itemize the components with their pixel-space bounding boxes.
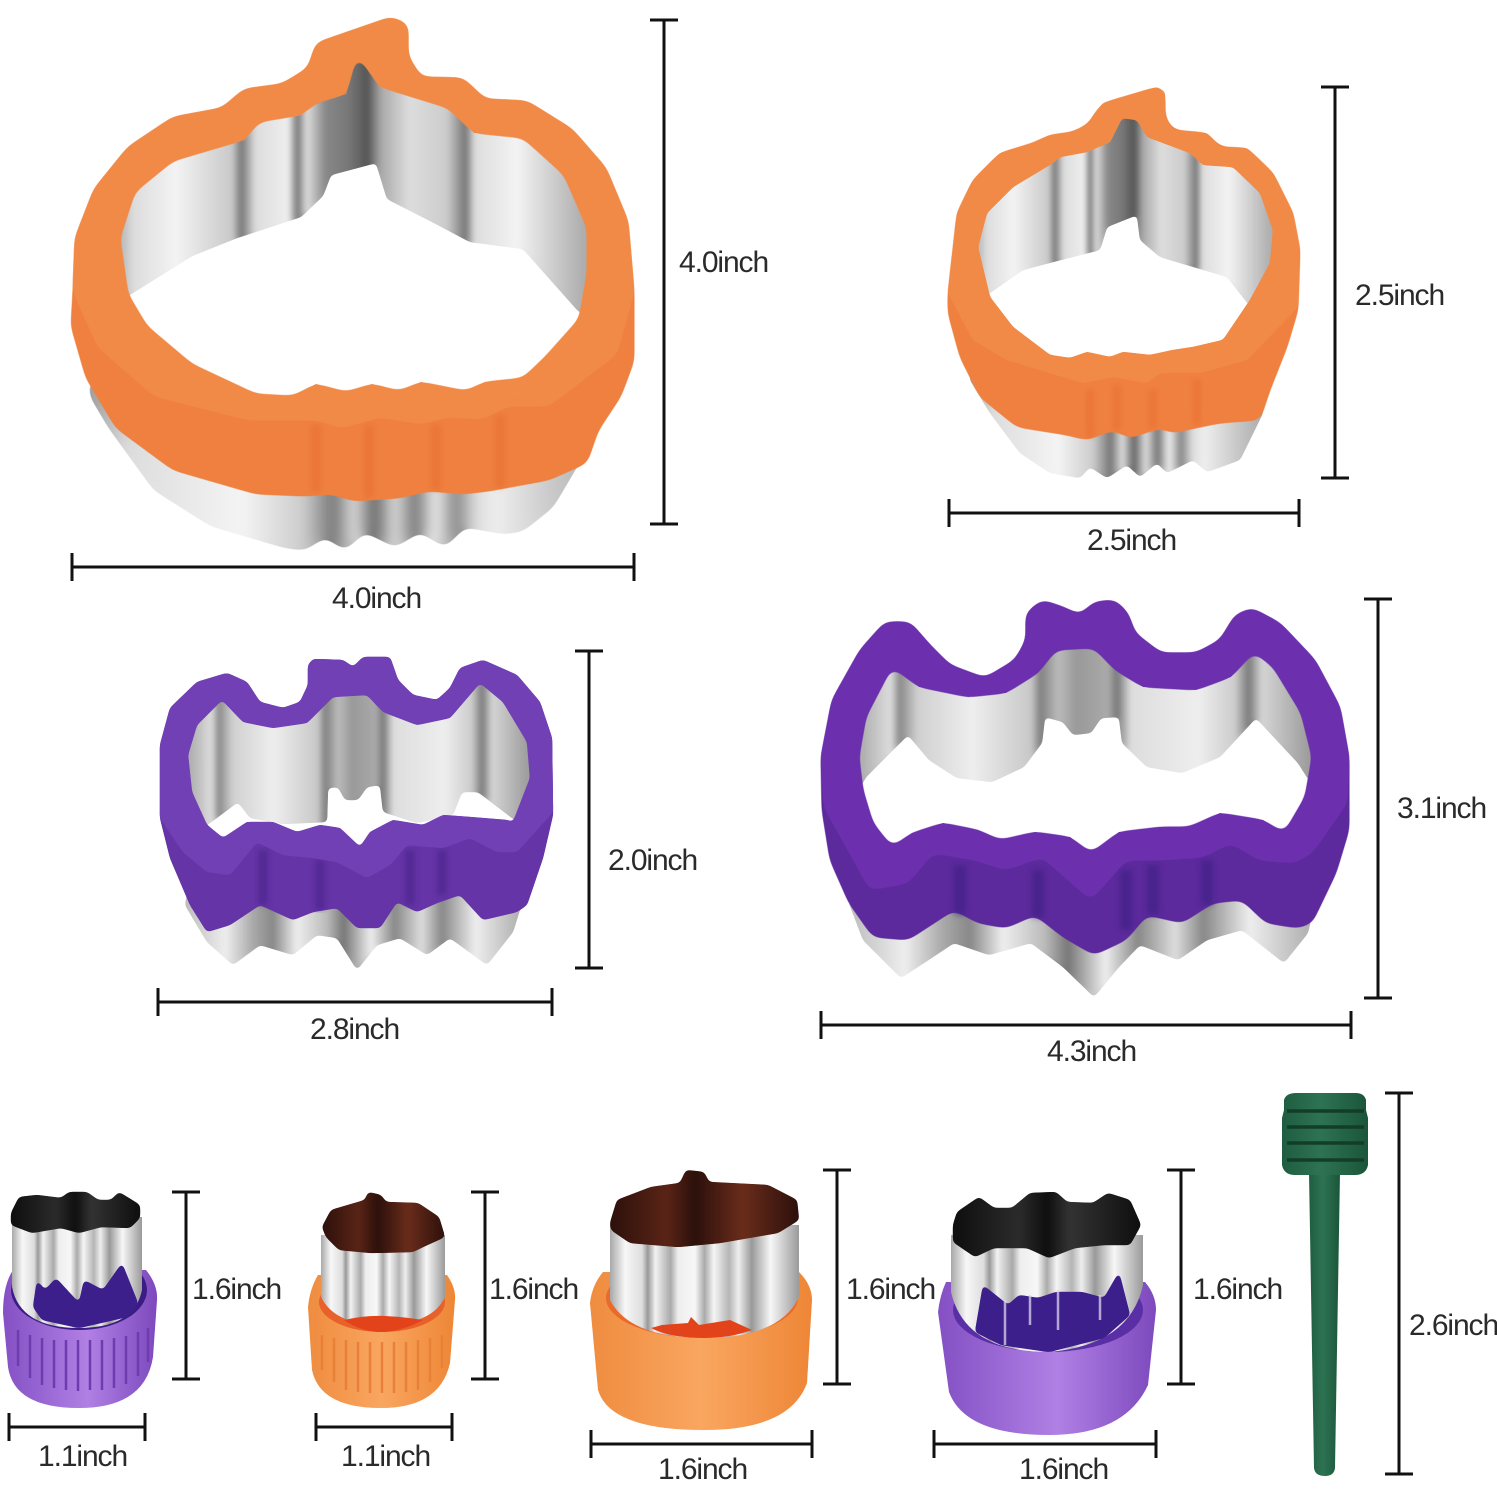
top face xyxy=(948,87,1300,383)
dimension: mini purple bat height: 1.6inch xyxy=(192,1273,281,1306)
medium purple bat cutter with smooth base xyxy=(938,1192,1156,1435)
dimension: small pumpkin width xyxy=(949,499,1299,557)
inner well xyxy=(953,1268,1143,1352)
inner metal wall xyxy=(120,40,587,315)
dimension: medium orange pumpkin height: 1.6inch xyxy=(846,1273,935,1306)
steel body xyxy=(12,1217,142,1328)
dark mouth xyxy=(953,1192,1141,1258)
inner metal wall xyxy=(860,648,1311,783)
dimension: honey dipper length: 2.6inch xyxy=(1409,1309,1497,1342)
small orange pumpkin cutter xyxy=(948,87,1300,478)
dimension: mini orange pumpkin height: 1.6inch xyxy=(489,1273,578,1306)
opening xyxy=(862,666,1308,850)
dimension: medium purple bat width xyxy=(934,1430,1156,1486)
mini orange pumpkin cutter with ribbed base xyxy=(308,1192,455,1408)
band ribs xyxy=(263,850,442,910)
large purple bat cutter xyxy=(821,600,1349,997)
dimension: large pumpkin width: 4.0inch xyxy=(332,582,421,615)
dark mouth xyxy=(322,1192,445,1253)
purple reflection xyxy=(975,1272,1130,1352)
opening xyxy=(979,118,1272,358)
head grooves xyxy=(1287,1111,1364,1160)
top face xyxy=(821,600,1349,900)
inner well xyxy=(11,1250,147,1330)
orange band xyxy=(948,87,1300,440)
band ribs xyxy=(1090,380,1197,438)
dimension: medium purple bat width: 1.6inch xyxy=(1019,1453,1108,1486)
opening xyxy=(188,688,530,845)
dimension: large bat width: 4.3inch xyxy=(1047,1035,1136,1068)
dimension: medium orange pumpkin height xyxy=(823,1170,935,1384)
dimension: large bat height xyxy=(1364,599,1486,998)
ribbed base xyxy=(3,1270,157,1408)
dimension: mini orange pumpkin width: 1.1inch xyxy=(341,1440,430,1473)
purple reflection xyxy=(33,1263,138,1328)
base ribs xyxy=(18,1328,148,1391)
dimension: small bat width: 2.8inch xyxy=(310,1013,399,1046)
dimension: small bat width xyxy=(158,988,552,1046)
dimension: large bat width xyxy=(821,1011,1351,1068)
dimension: medium orange pumpkin width: 1.6inch xyxy=(658,1453,747,1486)
purple band xyxy=(160,657,553,932)
red reflection xyxy=(344,1316,423,1332)
dimension: large pumpkin height xyxy=(650,20,768,524)
metal lower edge xyxy=(90,380,598,550)
red reflection xyxy=(651,1317,752,1338)
inner well xyxy=(606,1258,798,1338)
top face xyxy=(73,17,634,428)
opening xyxy=(130,82,580,396)
inner metal wall xyxy=(978,118,1272,304)
dimension: mini orange pumpkin height xyxy=(471,1192,578,1379)
smooth base xyxy=(590,1272,812,1430)
dimension: large pumpkin height: 4.0inch xyxy=(679,246,768,279)
band ribs xyxy=(316,415,500,498)
dimension: mini purple bat height xyxy=(172,1192,281,1379)
dimension: mini orange pumpkin width xyxy=(316,1413,452,1473)
dimension: mini purple bat width xyxy=(9,1413,145,1473)
dimension: medium purple bat height: 1.6inch xyxy=(1193,1273,1282,1306)
base ribs xyxy=(322,1335,442,1393)
metal lower edge xyxy=(970,370,1263,478)
dark mouth xyxy=(11,1192,140,1233)
metal lower edge xyxy=(849,870,1315,997)
dimension: small bat height: 2.0inch xyxy=(608,844,697,877)
ribbed base xyxy=(308,1275,455,1408)
dimension: honey dipper length xyxy=(1385,1093,1497,1474)
top face xyxy=(160,657,553,878)
green honey dipper stick xyxy=(1282,1093,1368,1476)
mini purple bat cutter with ribbed base xyxy=(3,1192,157,1408)
dimension: small pumpkin height: 2.5inch xyxy=(1355,279,1444,312)
large orange pumpkin cutter xyxy=(71,17,634,550)
dimension: medium purple bat height xyxy=(1167,1170,1282,1384)
band ribs xyxy=(960,860,1207,930)
dimension: medium orange pumpkin width xyxy=(591,1430,812,1486)
dimension: large pumpkin width xyxy=(72,553,634,615)
steel body xyxy=(610,1225,799,1338)
dimension: small pumpkin width: 2.5inch xyxy=(1087,524,1176,557)
medium orange pumpkin cutter with smooth base xyxy=(590,1170,812,1430)
dimension: small bat height xyxy=(575,651,697,968)
stem xyxy=(1309,1172,1340,1476)
dimension: large bat height: 3.1inch xyxy=(1397,792,1486,825)
ribbed head xyxy=(1282,1093,1368,1175)
inner metal wall xyxy=(188,685,530,824)
reflection highlights xyxy=(1005,1290,1100,1345)
dark mouth xyxy=(610,1170,799,1247)
steel body xyxy=(321,1235,445,1325)
smooth base xyxy=(938,1282,1156,1435)
purple band xyxy=(821,600,1349,955)
inner well xyxy=(319,1272,445,1332)
small purple bat cutter xyxy=(160,657,553,970)
steel body xyxy=(951,1235,1143,1352)
dimension: mini purple bat width: 1.1inch xyxy=(38,1440,127,1473)
metal lower edge xyxy=(185,880,523,970)
orange band xyxy=(71,17,634,501)
dimension: small pumpkin height xyxy=(1321,87,1444,478)
